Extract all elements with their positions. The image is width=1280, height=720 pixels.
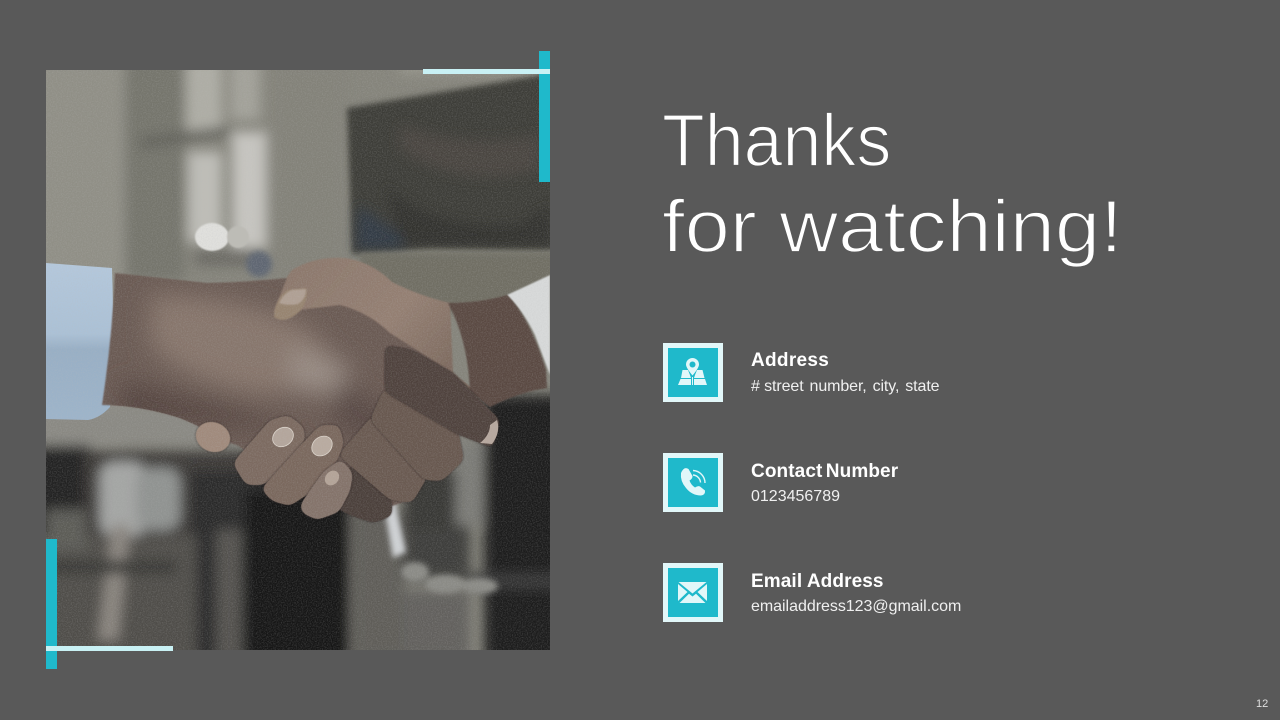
email address text: Email Address [751, 571, 884, 592]
address text: Address [751, 350, 829, 371]
page number: 12 [1256, 698, 1268, 710]
left hand [102, 273, 500, 523]
wall picture frame [347, 72, 560, 254]
title [662, 99, 1123, 268]
accent: top light bar [423, 69, 550, 74]
title: for watching! [662, 185, 1123, 268]
clasped fingers [191, 415, 353, 520]
accent: bottom teal bar [46, 539, 57, 669]
lower room [30, 395, 564, 670]
email address text [751, 571, 961, 615]
right hand and cuff behind [272, 258, 550, 407]
icon: address map pin [663, 343, 723, 402]
main hand fingers [336, 345, 500, 523]
address text: # street number, city, state [751, 378, 939, 395]
title: Thanks [662, 99, 891, 182]
right thumb tip [274, 288, 307, 320]
contact number text [751, 461, 898, 505]
contact number text: 0123456789 [751, 488, 840, 505]
icon: phone [663, 453, 723, 512]
left sleeve [46, 263, 114, 420]
email address text: emailaddress123@gmail.com [751, 598, 961, 615]
accent: top teal bar [539, 51, 550, 182]
photo: handshake [46, 70, 550, 650]
photo background: blurred office [46, 70, 550, 650]
accent: bottom light bar [46, 646, 173, 651]
contact number text: Contact Number [751, 461, 898, 482]
icon: envelope [663, 563, 723, 622]
address text [751, 350, 939, 395]
